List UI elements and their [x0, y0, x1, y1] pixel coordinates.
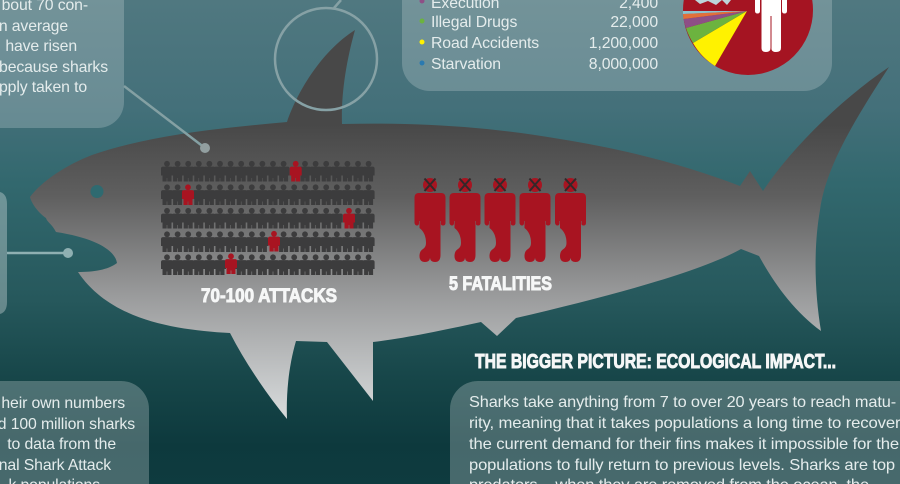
white person in pie: [755, 0, 787, 52]
bottom left panel text: to data from the: [7, 436, 116, 453]
label: 70-100 attacks: 70-100 ATTACKS: [201, 286, 337, 307]
legend: road accidents: 1,200,000: [589, 35, 658, 52]
top left panel text: n average: [0, 18, 68, 35]
panel: causes of death: [402, 0, 832, 91]
top left panel text: because sharks: [0, 59, 108, 76]
ecological impact body text: the current demand for their fins makes it impossible for the: [469, 436, 899, 453]
legend: starvation: Starvation: [431, 56, 501, 73]
callout line: attacks: [124, 86, 210, 153]
legend: execution: [420, 0, 658, 12]
top left panel text: pply taken to: [0, 79, 87, 96]
panel: bottom left text: [0, 381, 149, 484]
legend: starvation: 8,000,000: [589, 56, 658, 73]
small shark mark in pie: [695, 0, 731, 5]
shark silhouette: [30, 30, 889, 419]
bottom left panel text: d 100 million sharks: [0, 416, 135, 433]
bottom left panel text: heir own numbers: [1, 395, 125, 412]
panel: left middle with jaw callout: [0, 192, 73, 314]
legend: illegal drugs: [420, 14, 658, 31]
ecological impact body text: Sharks take anything from 7 to over 20 years to reach matu-: [469, 394, 896, 411]
panel: ecological impact text: [450, 381, 900, 484]
legend: illegal drugs: Illegal Drugs: [431, 14, 517, 31]
legend: starvation: [420, 56, 658, 73]
pictogram: 70-100 attacks: [161, 161, 375, 275]
label: 5 fatalities: 5 FATALITIES: [449, 274, 552, 295]
callout circle: dorsal fin: [275, 0, 377, 110]
bottom left panel text: [0, 395, 135, 484]
panel: top left text: [0, 0, 124, 128]
ecological impact body text: rity, meaning that it takes populations a long time to recover;: [469, 415, 900, 432]
bottom left panel text: nal Shark Attack: [0, 457, 111, 474]
ecological impact body text: populations to fully return to previous levels. Sharks are top: [469, 457, 895, 474]
shark eye: [90, 185, 104, 198]
pictogram: 5 fatalities: [414, 178, 586, 262]
top left panel text: have risen: [5, 38, 77, 55]
legend: road accidents: [420, 35, 658, 52]
legend: road accidents: Road Accidents: [431, 35, 539, 52]
top left panel text: [0, 0, 108, 96]
highlighted red figures: [182, 161, 355, 274]
ecological impact body text: [469, 394, 900, 484]
pie chart: [683, 0, 813, 75]
legend: illegal drugs: 22,000: [610, 14, 658, 31]
